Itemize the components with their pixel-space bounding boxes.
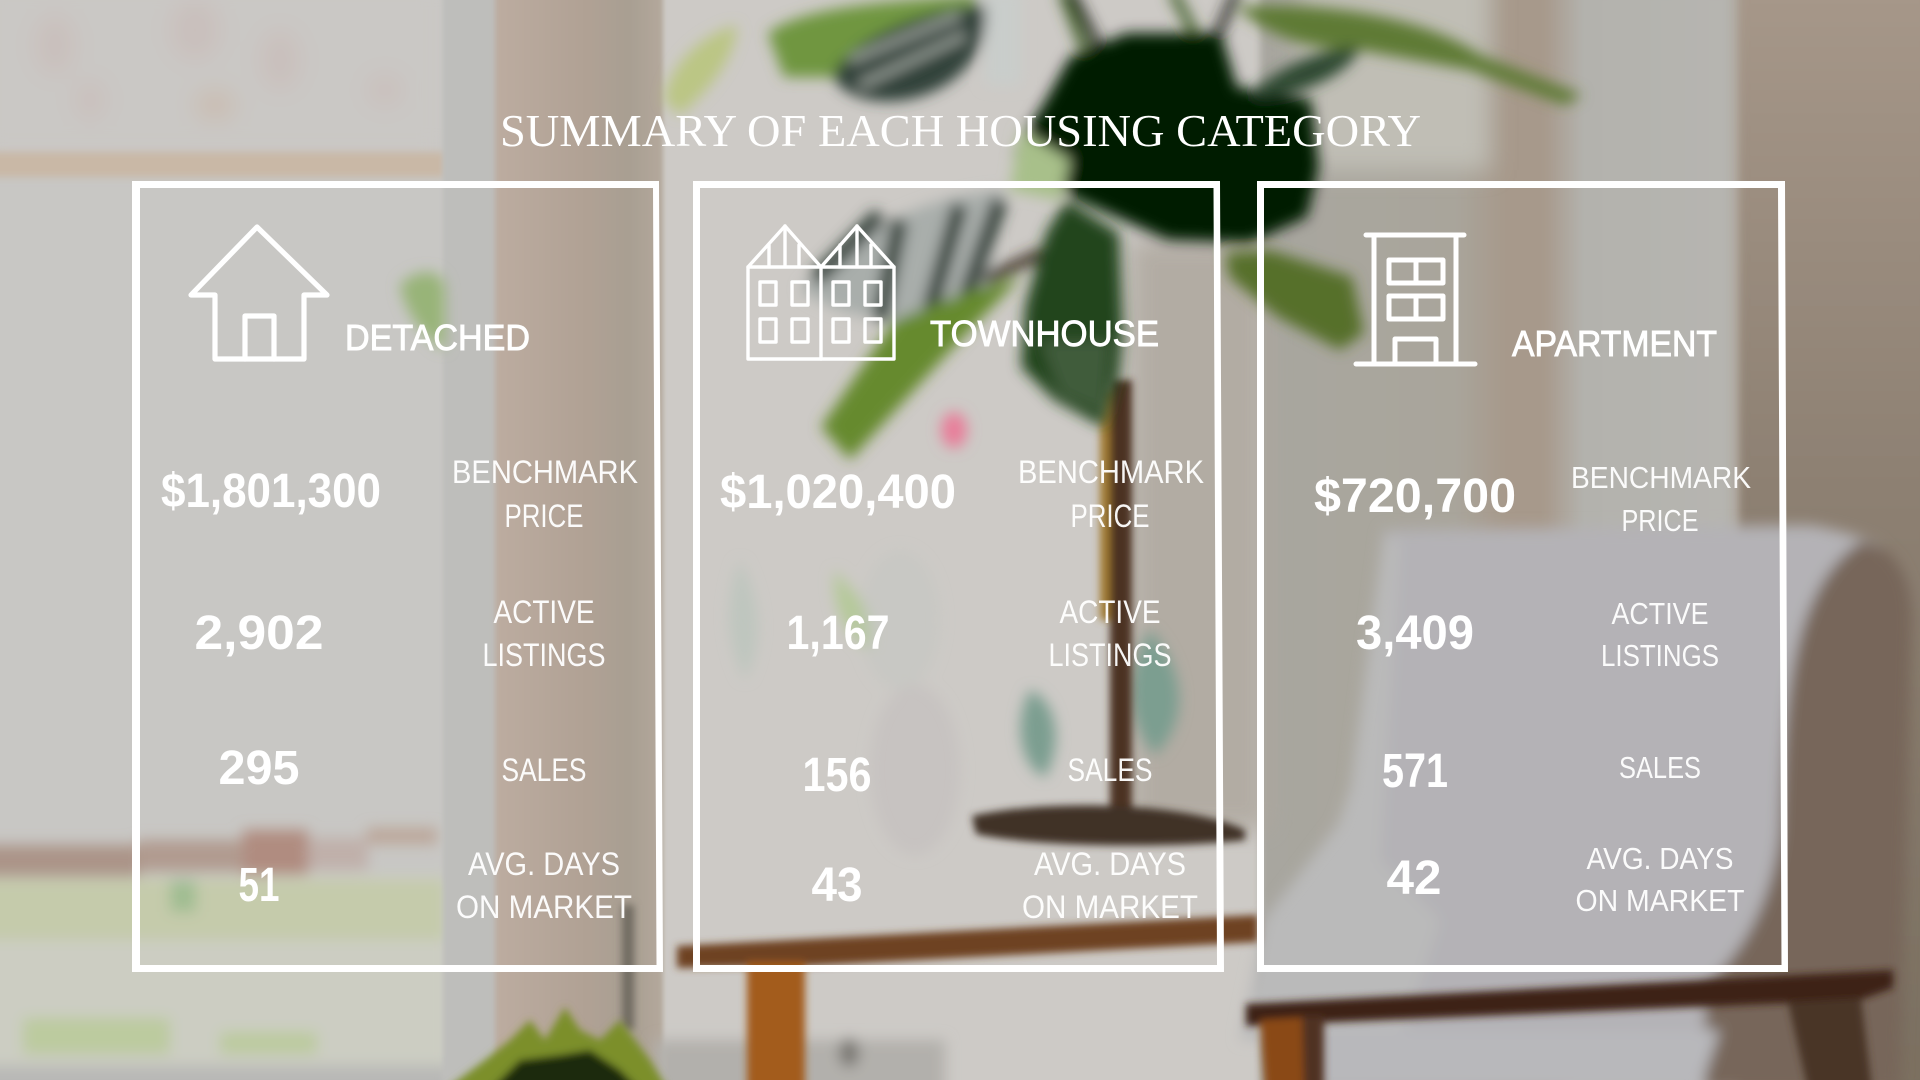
potted plant trunk, pot and table (677, 380, 1258, 1080)
metric: average days on market (812, 846, 1198, 925)
metric: sales: SALES (1068, 752, 1152, 788)
metric: benchmark price: BENCHMARK (452, 454, 638, 490)
metric: average days on market: ON MARKET (1022, 889, 1198, 925)
metric: active listings: ACTIVE (1612, 596, 1708, 631)
metric: benchmark price: BENCHMARK (1571, 460, 1751, 495)
metric: benchmark price (720, 454, 1204, 534)
metric: sales (802, 749, 1152, 802)
heading: detached: DETACHED (345, 317, 530, 358)
metric: average days on market: ON MARKET (1576, 883, 1745, 918)
foliage (400, 0, 1582, 460)
metric: average days on market: AVG. DAYS (1034, 846, 1186, 882)
metric: benchmark price: $1,801,300 (161, 465, 381, 518)
metric: average days on market: AVG. DAYS (468, 846, 620, 882)
metric: benchmark price (161, 454, 638, 534)
metric: benchmark price: PRICE (504, 498, 584, 534)
panel: apartment (1257, 181, 1788, 972)
metric: average days on market: 42 (1386, 852, 1442, 905)
heading: townhouse: TOWNHOUSE (930, 313, 1159, 354)
metric: average days on market: AVG. DAYS (1586, 841, 1734, 876)
metric: active listings: LISTINGS (1601, 638, 1719, 673)
metric: active listings: LISTINGS (1048, 637, 1172, 673)
metric: average days on market: ON MARKET (456, 889, 632, 925)
metric: sales: SALES (1619, 750, 1701, 785)
metric: average days on market: 43 (812, 859, 862, 912)
metric: active listings: ACTIVE (494, 594, 594, 630)
metric: sales: 571 (1382, 745, 1448, 798)
metric: benchmark price: PRICE (1070, 498, 1150, 534)
metric: active listings: 1,167 (786, 607, 890, 660)
metric: benchmark price: BENCHMARK (1018, 454, 1204, 490)
metric: benchmark price: PRICE (1622, 503, 1698, 538)
metric: benchmark price (1314, 460, 1751, 538)
metric: active listings (786, 594, 1172, 673)
metric: average days on market (1386, 841, 1745, 918)
small plant at bottom (445, 1007, 668, 1080)
metric: sales: 295 (218, 742, 300, 795)
panel: detached (132, 181, 663, 972)
icon: house (191, 227, 327, 359)
metric: sales (218, 742, 586, 795)
metric: sales: SALES (502, 752, 586, 788)
metric: active listings: ACTIVE (1060, 594, 1160, 630)
metric: sales (1382, 745, 1701, 798)
metric: sales: 156 (802, 749, 872, 802)
metric: benchmark price: $1,020,400 (720, 466, 956, 519)
metric: average days on market (238, 846, 632, 925)
metric: average days on market: 51 (238, 859, 280, 912)
chair (1240, 525, 1912, 1080)
metric: benchmark price: $720,700 (1314, 470, 1516, 523)
metric: active listings (1356, 596, 1719, 673)
faint hanging foliage (655, 550, 1179, 1080)
metric: active listings: 3,409 (1356, 607, 1474, 660)
icon: townhouse (748, 226, 894, 359)
metric: active listings: LISTINGS (482, 637, 606, 673)
title: SUMMARY OF EACH HOUSING CATEGORY (500, 105, 1421, 156)
window bottom: fence and grass (0, 828, 450, 1080)
metric: active listings (194, 594, 606, 673)
heading: apartment: APARTMENT (1512, 323, 1717, 364)
metric: active listings: 2,902 (194, 607, 324, 660)
panel: townhouse (693, 181, 1224, 972)
icon: apartment building (1356, 235, 1475, 364)
